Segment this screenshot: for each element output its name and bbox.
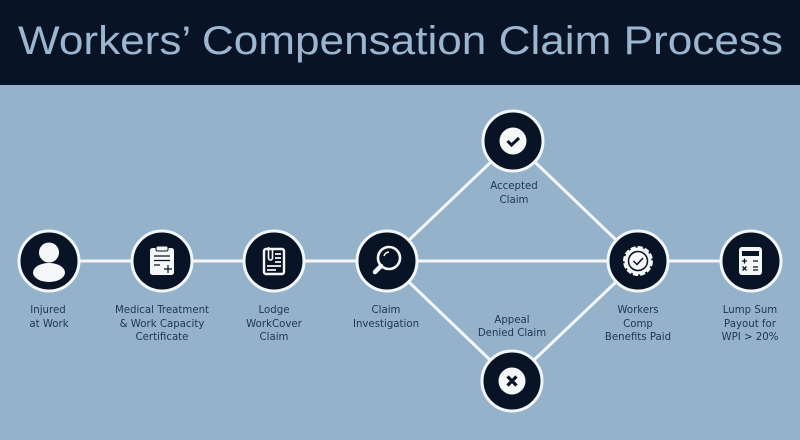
label: medical treatment: & Work Capacity [120,319,204,330]
label: medical treatment: Medical Treatment [115,305,209,316]
label: medical treatment: Certificate [136,332,188,343]
header band [0,0,800,85]
node: lump sum payout [721,231,781,291]
label: accepted claim: Claim [500,195,529,206]
label: accepted claim: Accepted [490,181,538,192]
node: medical treatment [132,231,192,291]
node: injured at work [19,231,79,291]
node: claim investigation [357,231,417,291]
title: Workers’ Compensation Claim Process [18,19,783,63]
node: lodge claim [244,231,304,291]
node: benefits paid [608,231,668,291]
icon: cross badge [498,368,526,394]
node: accepted claim [483,111,543,171]
icon: seal with check [624,248,652,274]
label: workers comp benefits paid: Comp [623,319,653,330]
label: claim investigation: Claim [372,305,401,316]
icon: person [33,242,65,282]
label: appeal denied claim: Denied Claim [478,328,546,339]
node: appeal denied claim [482,351,542,411]
label: workers comp benefits paid: Workers [617,305,659,316]
label: workers comp benefits paid: Benefits Paid [605,332,671,343]
icon: check badge [500,128,526,154]
label: injured at work: Injured [30,305,66,316]
label: lump sum payout: Lump Sum [723,305,777,316]
label: lodge workcover: Claim [260,332,289,343]
connector lines [49,141,751,381]
label: injured at work: at Work [29,319,69,330]
label: lump sum payout: WPI > 20% [722,332,779,343]
label: lodge workcover: Lodge [259,305,289,316]
label: appeal denied claim: Appeal [494,315,530,326]
icon: clipboard [150,246,174,275]
icon: magnifying glass [375,247,400,272]
icon: document with clip [264,247,284,274]
label: claim investigation: Investigation [353,319,419,330]
label: lodge workcover: WorkCover [246,319,303,330]
icon: calculator [739,247,762,275]
label: lump sum payout: Payout for [724,319,777,330]
